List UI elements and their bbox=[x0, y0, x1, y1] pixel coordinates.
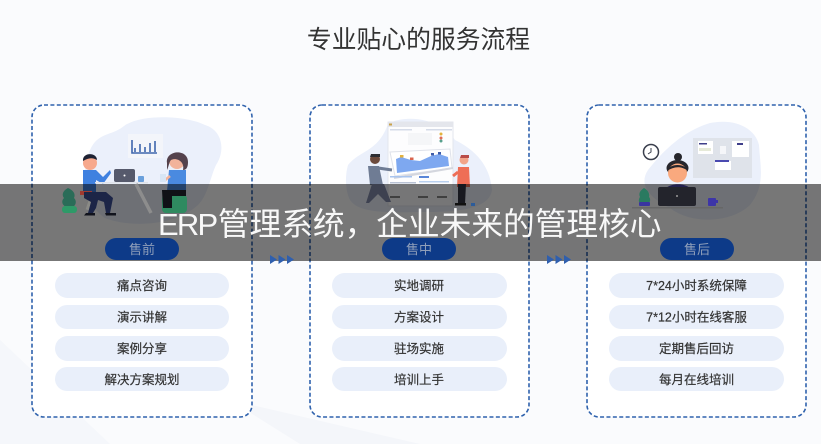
tag: 售中 bbox=[382, 238, 456, 260]
panel: after-sales bbox=[587, 105, 806, 417]
list item: 定期售后回访 bbox=[659, 341, 734, 356]
list item: 7*12小时在线客服 bbox=[646, 310, 747, 324]
list item bbox=[55, 336, 229, 361]
arrow: pre-sales to in-sales bbox=[270, 255, 294, 264]
list item: 培训上手 bbox=[394, 372, 444, 387]
list item bbox=[332, 273, 507, 298]
tag: 售后 bbox=[660, 238, 734, 260]
illustration: report board bbox=[346, 119, 492, 212]
list item: 痛点咨询 bbox=[117, 278, 167, 293]
illustration details: after-sales desk on banner bbox=[632, 187, 723, 208]
list item bbox=[332, 305, 507, 329]
illustration: consultation bbox=[83, 117, 221, 224]
list item: 案例分享 bbox=[117, 341, 167, 356]
list item bbox=[609, 367, 784, 391]
overlay banner bbox=[0, 184, 821, 261]
list item bbox=[332, 367, 507, 391]
banner text: ERP管理系统，企业未来的管理核心 bbox=[158, 206, 661, 242]
list item bbox=[609, 305, 784, 329]
list item bbox=[609, 273, 784, 298]
list item: 演示讲解 bbox=[117, 310, 167, 324]
illustration details: in-sales figures on banner bbox=[366, 184, 475, 206]
list item bbox=[55, 367, 229, 391]
list item: 7*24小时系统保障 bbox=[646, 278, 747, 293]
tag: 售后: 售后 bbox=[684, 242, 710, 257]
list item bbox=[609, 336, 784, 361]
arrow: in-sales to after-sales bbox=[547, 255, 571, 264]
tag: 售中: 售中 bbox=[406, 242, 432, 257]
list item: 每月在线培训 bbox=[659, 372, 734, 387]
list item bbox=[332, 336, 507, 361]
list item: 解决方案规划 bbox=[104, 372, 180, 387]
tag: 售前 bbox=[105, 238, 179, 260]
list item: 驻场实施 bbox=[394, 341, 444, 356]
panel: in-sales bbox=[310, 105, 529, 417]
illustration details: pre-sales figures on banner bbox=[62, 184, 187, 216]
list item: 方案设计 bbox=[394, 310, 444, 324]
list item: 实地调研 bbox=[394, 278, 444, 293]
list item bbox=[55, 273, 229, 298]
illustration: customer service bbox=[644, 122, 761, 220]
title: 专业贴心的服务流程 bbox=[307, 26, 530, 54]
panel: pre-sales bbox=[32, 105, 252, 417]
tag: 售前: 售前 bbox=[129, 242, 155, 257]
list item bbox=[55, 305, 229, 329]
